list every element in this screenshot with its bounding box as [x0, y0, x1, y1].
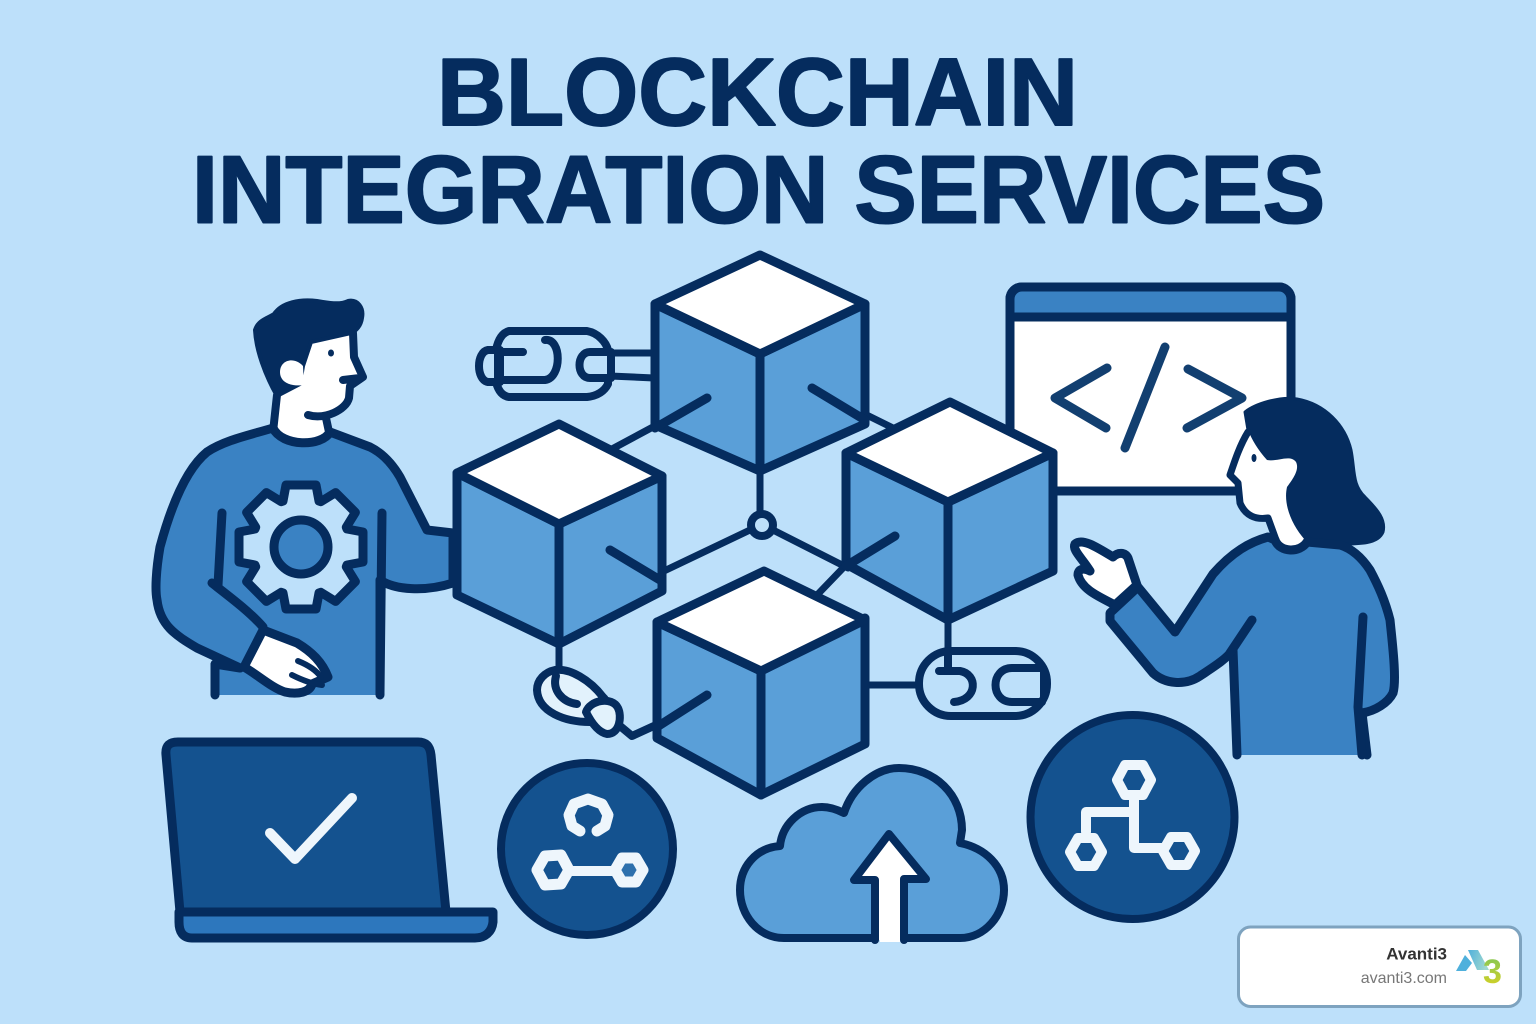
gear centre	[274, 520, 328, 574]
woman sweater	[1110, 537, 1395, 755]
laptop with check	[166, 742, 493, 938]
chain: bottom left	[537, 670, 656, 736]
man shirt	[156, 428, 453, 695]
title: INTEGRATION SERVICES	[192, 136, 1325, 244]
network hub node	[751, 514, 773, 536]
man shirt lines	[212, 513, 382, 693]
chain: right	[919, 651, 1047, 716]
icon badge: network left	[501, 763, 673, 935]
man hand	[244, 630, 328, 693]
man hair	[255, 300, 362, 396]
man eye	[328, 350, 334, 356]
network connectors	[559, 353, 948, 685]
icon: gear	[239, 485, 363, 609]
title	[192, 39, 1325, 244]
card url: avanti3.com	[1361, 970, 1447, 987]
window with code	[1010, 287, 1291, 491]
block: bottom cube	[657, 571, 865, 795]
man fingers	[292, 661, 322, 685]
watermark card	[1238, 927, 1520, 1006]
title: BLOCKCHAIN	[437, 39, 1078, 146]
block: right cube	[846, 402, 1053, 620]
icon: cloud upload	[740, 768, 1004, 942]
man with gear shirt	[156, 300, 453, 695]
woman eye	[1252, 454, 1256, 462]
code symbol	[1055, 347, 1242, 448]
block: top cube	[655, 255, 865, 471]
chain: top left	[479, 331, 611, 397]
woman hand	[1074, 542, 1137, 605]
card brand name: Avanti3	[1386, 944, 1447, 964]
icon badge: network right	[1030, 715, 1234, 919]
woman sweater lines	[1230, 617, 1363, 755]
block: left cube	[457, 424, 662, 644]
man face and neck fill	[273, 333, 363, 450]
woman pointing	[1074, 398, 1395, 755]
logo A3: 3	[1483, 953, 1502, 991]
woman hair	[1245, 398, 1384, 544]
logo A3	[1456, 950, 1502, 991]
upload arrow	[854, 834, 926, 940]
man face outline	[273, 333, 363, 432]
icon: checkmark	[270, 798, 352, 859]
woman face	[1230, 430, 1305, 552]
man ear	[280, 360, 304, 385]
